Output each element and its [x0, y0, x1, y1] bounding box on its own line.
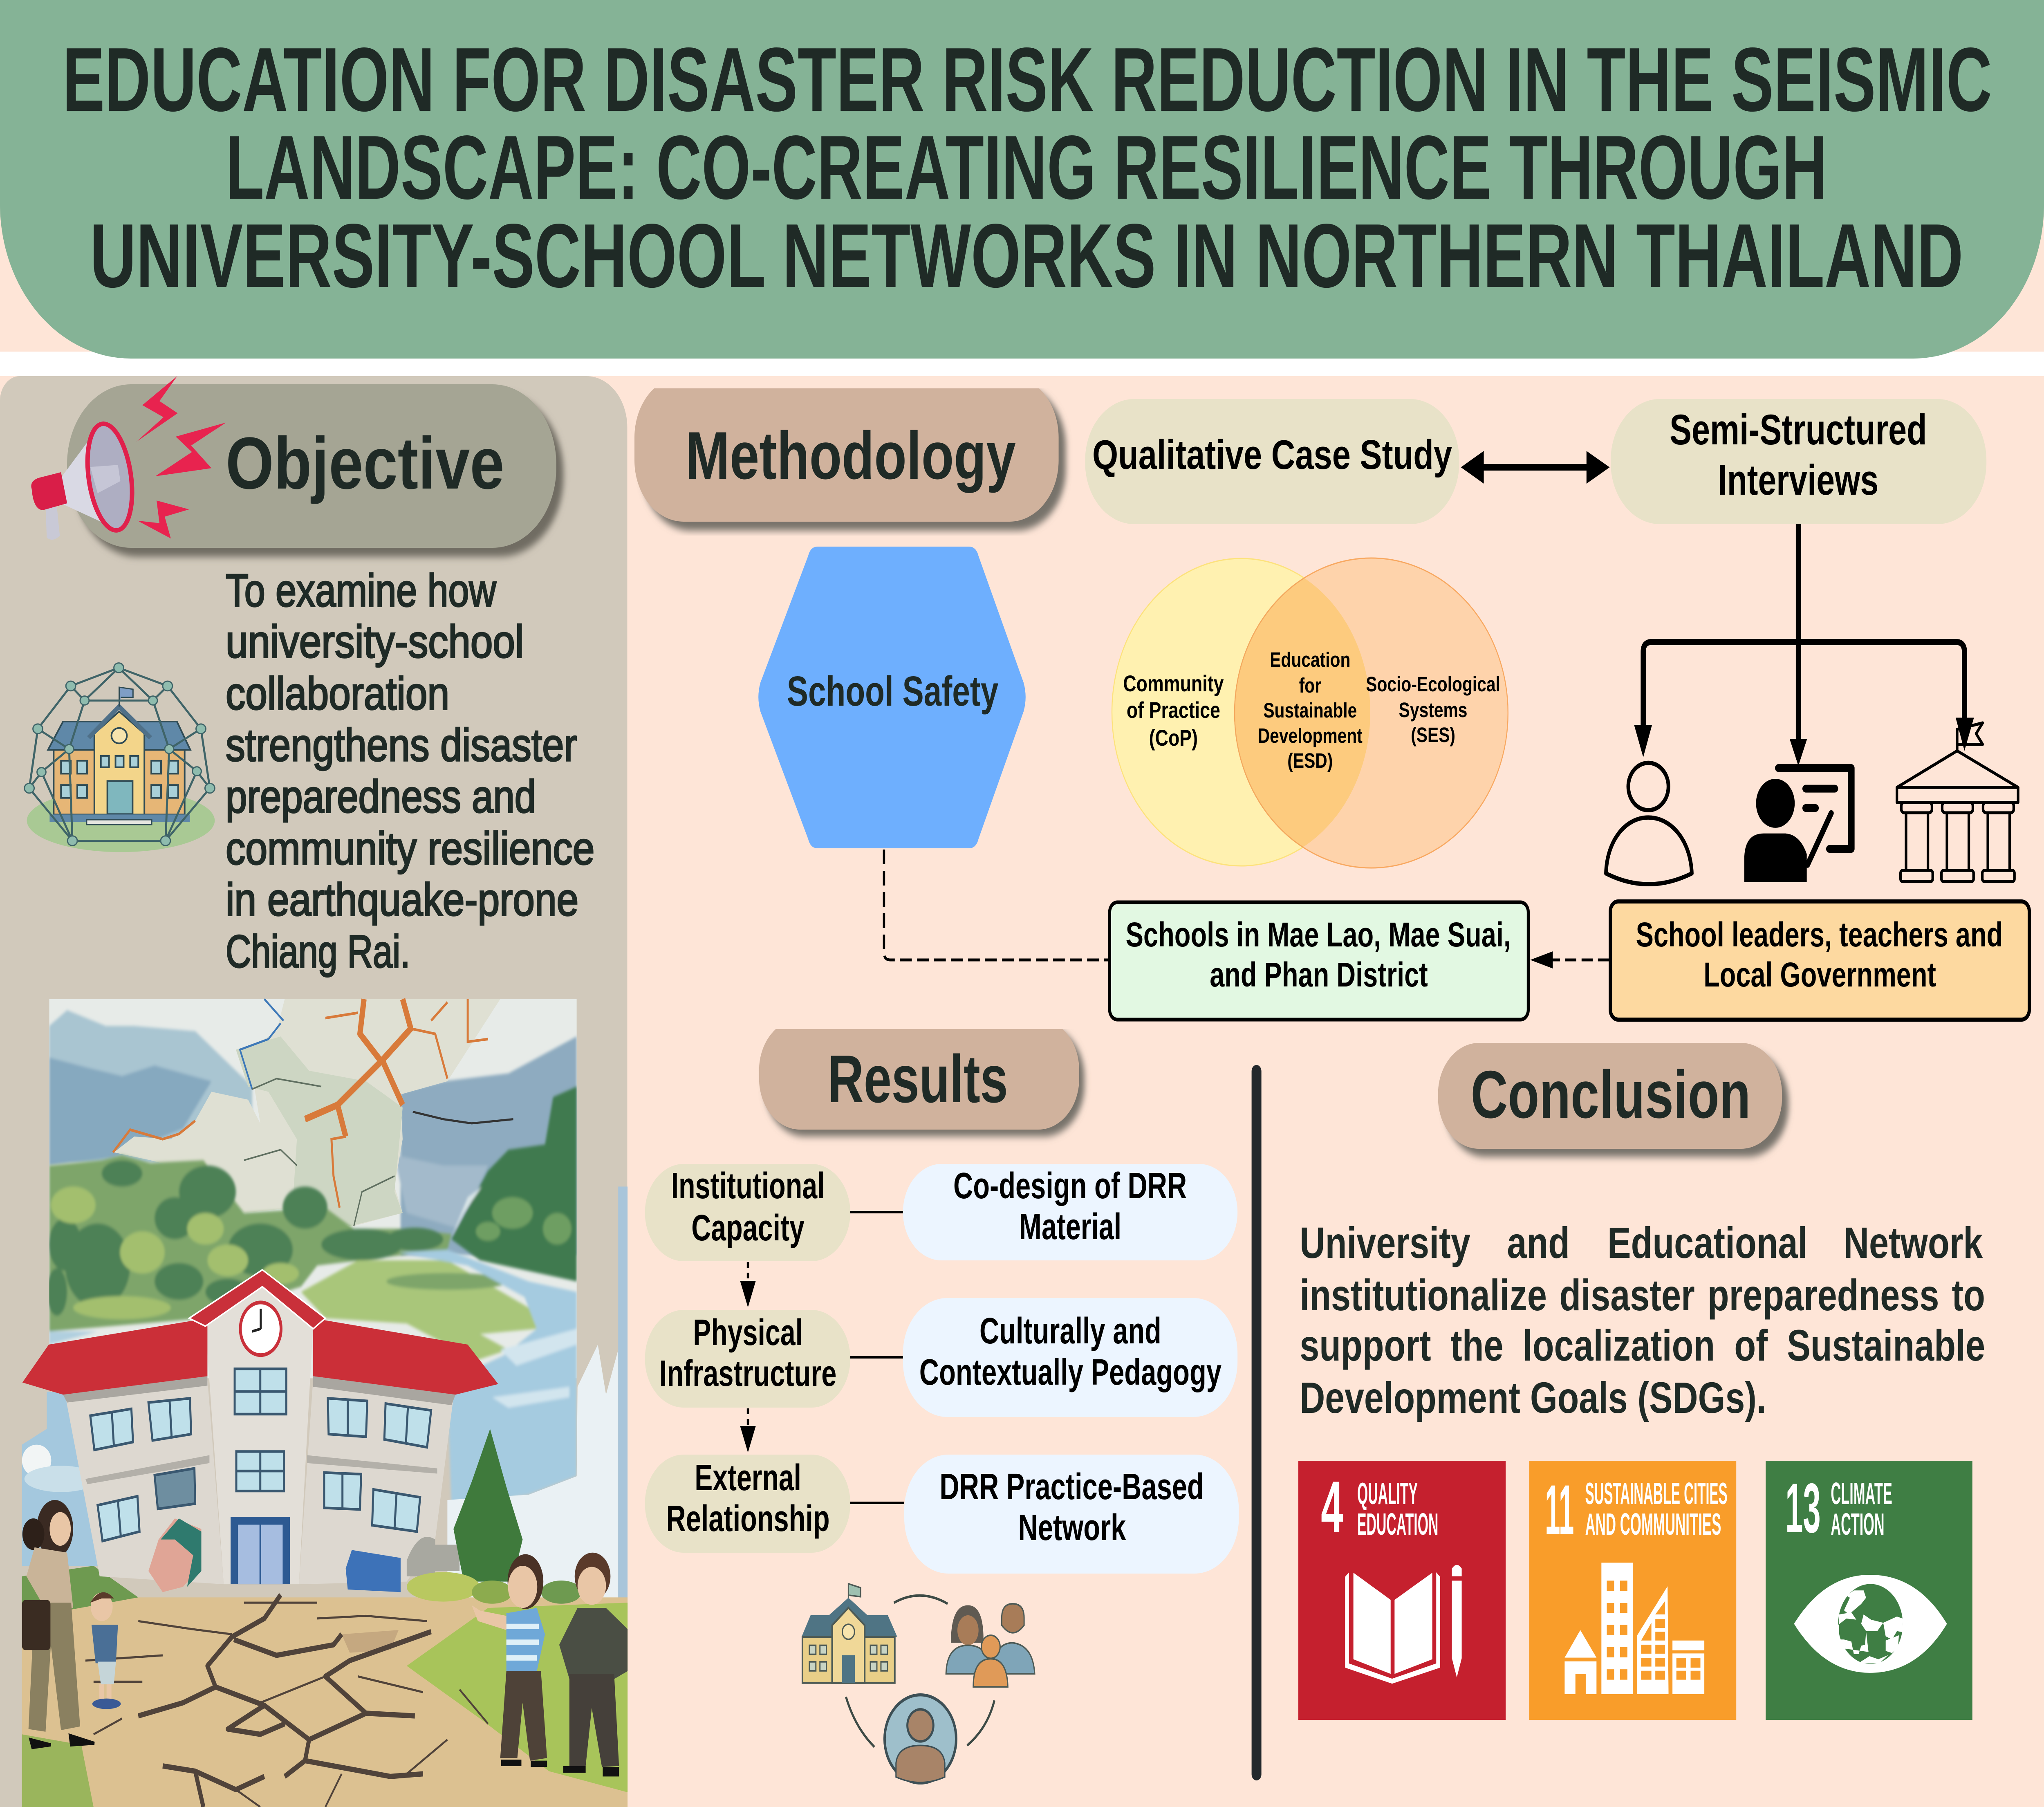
hexagon: school safety	[758, 547, 1026, 848]
pill: institutional capacity: Capacity	[691, 1207, 805, 1249]
title: LANDSCAPE: CO-CREATING RESILIENCE THROUGH	[226, 117, 1827, 218]
illustration: cracked school in the landscape	[22, 999, 628, 1807]
conclusion text: localization	[1523, 1320, 1715, 1370]
results heading pill: Results	[828, 1041, 1008, 1116]
methodology heading pill: Methodology	[686, 418, 1016, 493]
door	[231, 1517, 290, 1584]
ground and grass	[22, 1566, 628, 1807]
pill: co-design of DRR material	[903, 1164, 1237, 1260]
conclusion text: preparedness	[1708, 1270, 1939, 1320]
objective text: in earthquake-prone	[226, 874, 578, 925]
forest and valley	[47, 1087, 577, 1508]
conclusion text: Network	[1844, 1218, 1983, 1267]
icon: school in network dome	[25, 663, 215, 864]
objective text: To examine how	[226, 565, 496, 616]
icon: city skyline	[1564, 1563, 1704, 1694]
pill: institutional capacity: Institutional	[671, 1165, 825, 1206]
objective text	[226, 565, 594, 977]
education for sustainable development label: for	[1299, 674, 1321, 697]
qualitative case study pill: Qualitative Case Study	[1092, 432, 1452, 478]
lower sky extensions	[22, 1186, 628, 1613]
arrow: interview branches	[1634, 524, 1974, 766]
objective text: university-school	[226, 617, 524, 667]
semi-structured interviews pill: Interviews	[1718, 456, 1878, 504]
education for sustainable development label	[1258, 648, 1363, 772]
icon: book and pencil	[1345, 1565, 1462, 1684]
pill: external relationship: Relationship	[666, 1498, 830, 1539]
icon: eye with globe	[1794, 1575, 1947, 1673]
conclusion text: to	[1952, 1270, 1985, 1320]
objective text: Chiang Rai.	[226, 926, 410, 977]
conclusion text: support	[1300, 1320, 1431, 1370]
SDG tile 11: sustainable cities: SUSTAINABLE CITIES	[1585, 1477, 1728, 1511]
box: school leaders	[1610, 901, 2029, 1020]
objective text: collaboration	[226, 668, 449, 719]
qualitative case study pill	[1085, 399, 1459, 524]
SDG tile 13: climate action	[1766, 1461, 1972, 1720]
SDG tile 4: quality education	[1298, 1461, 1506, 1720]
SDG tile 13: climate action: 13	[1785, 1469, 1821, 1548]
pill: external relationship	[645, 1455, 850, 1553]
objective heading pill	[67, 384, 563, 557]
SDG tile 13: climate action: CLIMATE	[1831, 1477, 1892, 1511]
cracked wall in the sky	[113, 999, 513, 1226]
education for sustainable development label: (ESD)	[1287, 749, 1333, 772]
socio-ecological systems label: (SES)	[1411, 723, 1455, 747]
conclusion text: institutionalize	[1300, 1270, 1547, 1320]
pill: institutional capacity	[645, 1164, 850, 1261]
arrow: dashed to schools box	[1530, 951, 1609, 969]
title banner	[0, 0, 2044, 359]
socio-ecological systems label: Socio-Ecological	[1366, 673, 1500, 696]
community of practice label: of Practice	[1127, 697, 1220, 723]
pill: physical infrastructure: Physical	[693, 1312, 803, 1353]
conclusion text: Sustainable	[1787, 1320, 1985, 1370]
pill: culturally and contextually pedagogy: Culturally and	[979, 1310, 1161, 1352]
conclusion text: disaster	[1559, 1270, 1695, 1320]
education for sustainable development label: Development	[1258, 724, 1363, 747]
arrow: double headed	[1461, 451, 1610, 484]
arrow: capacity to infrastructure	[740, 1262, 756, 1307]
SDG tile 11: sustainable cities: 11	[1545, 1471, 1574, 1549]
clock	[240, 1303, 281, 1355]
education for sustainable development label: Education	[1270, 648, 1350, 671]
methodology heading pill	[634, 376, 1066, 531]
community of practice label: Community	[1123, 670, 1224, 696]
box: schools in districts	[1109, 902, 1528, 1020]
pill: external relationship: External	[695, 1457, 801, 1498]
SDG tile 13: climate action: ACTION	[1831, 1508, 1885, 1542]
SDG tile 4: quality education: 4	[1321, 1466, 1343, 1548]
icon: lightning bolts	[136, 376, 226, 538]
conclusion text: of	[1734, 1320, 1768, 1370]
tree and bushes	[407, 1429, 582, 1604]
conclusion text	[1300, 1218, 1985, 1422]
semi-structured interviews pill	[1611, 399, 1986, 524]
pill: physical infrastructure	[645, 1310, 850, 1408]
sky and mountains	[49, 999, 577, 1378]
pill: co-design of DRR material: Co-design of DRR	[953, 1165, 1187, 1206]
conclusion text: the	[1450, 1320, 1504, 1370]
conclusion text: University	[1300, 1218, 1470, 1267]
box: schools in districts: Schools in Mae Lao, Mae Suai,	[1126, 916, 1511, 954]
venn diagram	[1112, 558, 1508, 868]
community of practice label: (CoP)	[1149, 725, 1198, 751]
socio-ecological systems label: Systems	[1399, 698, 1468, 722]
school building	[22, 1270, 498, 1592]
box: school leaders: School leaders, teachers and	[1636, 916, 2003, 954]
two men	[472, 1553, 628, 1776]
icon: government building	[1897, 723, 2018, 881]
icon: school community cycle	[802, 1584, 1035, 1783]
box: schools in districts: and Phan District	[1210, 956, 1428, 994]
vertical divider	[1251, 1071, 1263, 1774]
socio-ecological systems label	[1366, 673, 1500, 747]
SDG tile 4: quality education: QUALITY	[1357, 1477, 1418, 1511]
community of practice label	[1123, 670, 1224, 751]
results heading pill	[759, 1019, 1085, 1137]
objective heading pill: Objective	[226, 422, 504, 504]
conclusion text: Educational	[1607, 1218, 1808, 1267]
pill: physical infrastructure: Infrastructure	[659, 1353, 836, 1394]
arrow: infrastructure to relationship	[740, 1408, 756, 1453]
conclusion text: and	[1507, 1218, 1570, 1267]
hexagon: school safety: School Safety	[787, 668, 999, 715]
education for sustainable development label: Sustainable	[1263, 699, 1357, 722]
panel: objective	[0, 376, 628, 1807]
conclusion heading pill: Conclusion	[1471, 1057, 1750, 1132]
pill: culturally and contextually pedagogy: Contextually Pedagogy	[919, 1352, 1221, 1393]
title	[63, 29, 1992, 306]
icon: megaphone	[31, 376, 226, 540]
icon: person outline	[1606, 763, 1692, 884]
pill: co-design of DRR material: Material	[1019, 1206, 1121, 1247]
pill: DRR practice-based network: Network	[1018, 1507, 1126, 1548]
pill: DRR practice-based network	[904, 1455, 1239, 1574]
objective text: community resilience	[226, 823, 594, 874]
box: school leaders: Local Government	[1703, 956, 1936, 994]
connectors between result pills	[850, 1212, 904, 1503]
objective text: preparedness and	[226, 771, 536, 822]
bench	[346, 1550, 401, 1592]
semi-structured interviews pill: Semi-Structured	[1670, 406, 1927, 454]
SDG tile 4: quality education: EDUCATION	[1357, 1508, 1438, 1542]
dashed connector: school safety to schools	[884, 850, 1109, 960]
windows	[90, 1369, 431, 1541]
icon: teacher at board	[1744, 768, 1851, 882]
conclusion heading pill	[1438, 1043, 1788, 1157]
pill: culturally and contextually pedagogy	[903, 1298, 1237, 1417]
objective text: strengthens disaster	[226, 720, 577, 771]
SDG tile 11: sustainable cities: AND COMMUNITIES	[1585, 1508, 1721, 1542]
SDG tile 11: sustainable cities	[1529, 1461, 1736, 1720]
woman and child	[22, 1500, 121, 1747]
school roof	[22, 1270, 498, 1394]
conclusion text: Development Goals (SDGs).	[1300, 1373, 1766, 1422]
pill: DRR practice-based network: DRR Practice-Based	[939, 1466, 1204, 1507]
